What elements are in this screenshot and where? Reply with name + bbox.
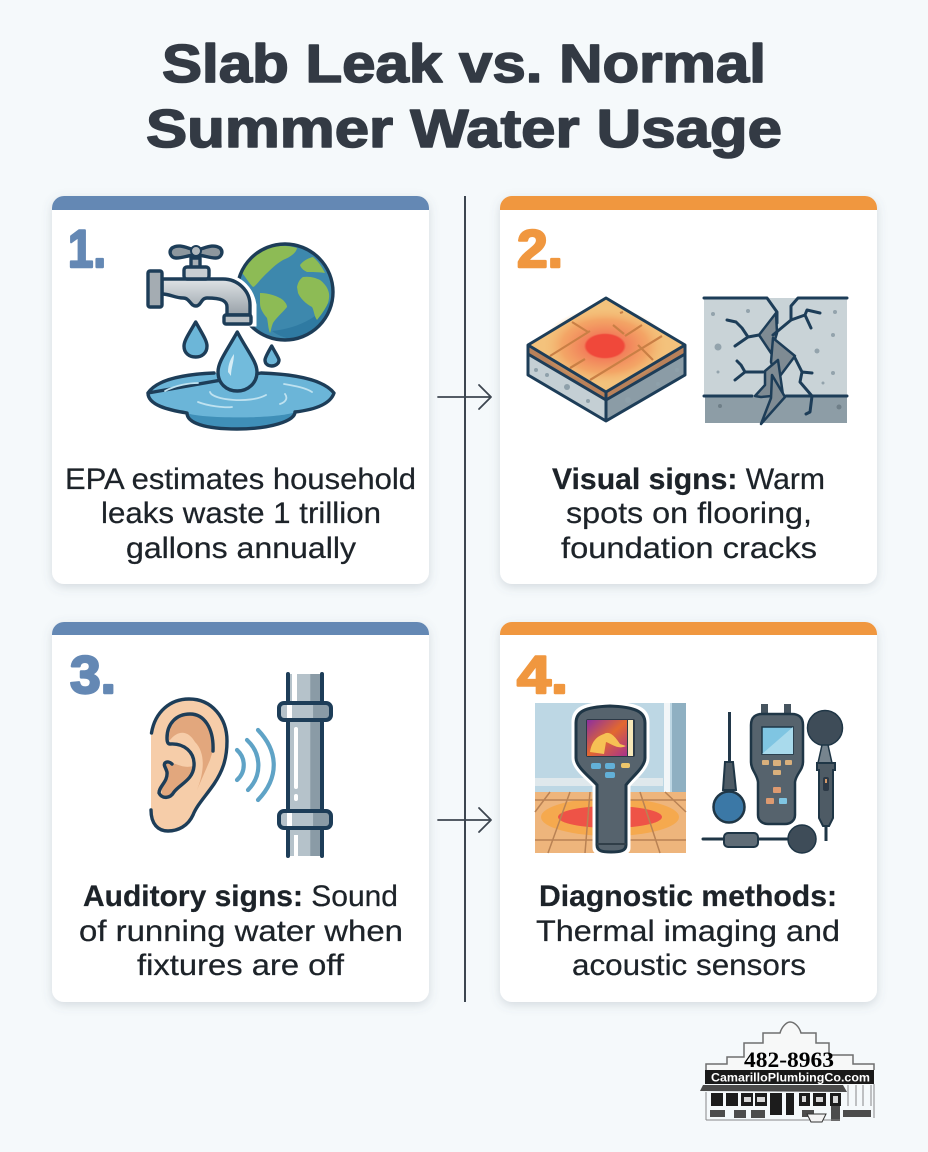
card 3 background (52, 622, 429, 1002)
globe (237, 244, 333, 340)
card 1 text: EPA estimates household (65, 463, 416, 496)
card 1 text: gallons annually (126, 532, 356, 565)
logo: Camarillo Plumbing storefront (700, 1022, 874, 1122)
icon: warm floor tile (528, 298, 685, 421)
panel: card 3 auditory signs (52, 622, 429, 1002)
card 2 text: spots on flooring, (566, 497, 812, 530)
icon: faucet, globe and puddle (148, 244, 334, 429)
logo website bar (705, 1070, 874, 1084)
number 1: 1. (68, 220, 106, 279)
card 2 text (552, 463, 825, 565)
card 3 top bar (52, 622, 429, 635)
icon: sound waves (237, 730, 274, 800)
card 3 text: fixtures are off (137, 949, 345, 982)
panel: card 2 visual signs (500, 196, 877, 584)
title (146, 34, 782, 159)
number 4: 4. (517, 646, 568, 705)
icon: cracked foundation (704, 298, 847, 424)
icon: acoustic microphone right (808, 710, 842, 841)
water drop right (265, 346, 279, 366)
icon: acoustic meter (751, 704, 803, 824)
card 1 text: leaks waste 1 trillion (101, 497, 381, 530)
card 3 text: of running water when (79, 915, 403, 948)
card 2 background (500, 196, 877, 584)
card 1 text (65, 463, 416, 565)
water drop left (184, 322, 207, 357)
card 4 text (536, 880, 840, 982)
card 3 text: Auditory signs: Sound (83, 880, 398, 913)
card 4 text: Diagnostic methods: (539, 880, 837, 913)
icon: pipe (279, 674, 331, 856)
icon: room scene with heat on floor (535, 703, 686, 853)
card 1 top bar (52, 196, 429, 210)
logo phone number: 482-8963 (744, 1047, 834, 1072)
center vertical divider line (464, 196, 466, 1002)
card 4 top bar (500, 622, 877, 635)
puddle (148, 373, 334, 429)
icon: acoustic probe left (714, 712, 744, 822)
icon: thermal camera (574, 704, 647, 854)
puddle ripples (165, 383, 312, 407)
faucet (148, 246, 252, 324)
water drop center (218, 332, 257, 391)
arrow: step 3 to step 4 (438, 808, 491, 832)
card 2 top bar (500, 196, 877, 210)
logo storefront (700, 1084, 874, 1122)
panel: card 1 household leaks (52, 196, 429, 584)
title: Summer Water Usage (146, 99, 782, 159)
card 2 text: foundation cracks (561, 532, 817, 565)
icon: ear (151, 699, 227, 831)
card 1 background (52, 196, 429, 584)
logo building outline (706, 1022, 874, 1070)
title: Slab Leak vs. Normal (162, 34, 766, 94)
logo website text: CamarilloPlumbingCo.com (711, 1072, 870, 1084)
card 4 text: acoustic sensors (572, 949, 806, 982)
card 4 text: Thermal imaging and (536, 915, 840, 948)
card 4 background (500, 622, 877, 1002)
number 3: 3. (70, 646, 116, 705)
panel: card 4 diagnostic methods (500, 622, 877, 1002)
arrow: step 1 to step 2 (438, 385, 491, 409)
card 3 text (79, 880, 403, 982)
icon: acoustic probe bottom (703, 825, 816, 853)
card 2 text: Visual signs: Warm (552, 463, 825, 496)
number 2: 2. (517, 220, 563, 279)
